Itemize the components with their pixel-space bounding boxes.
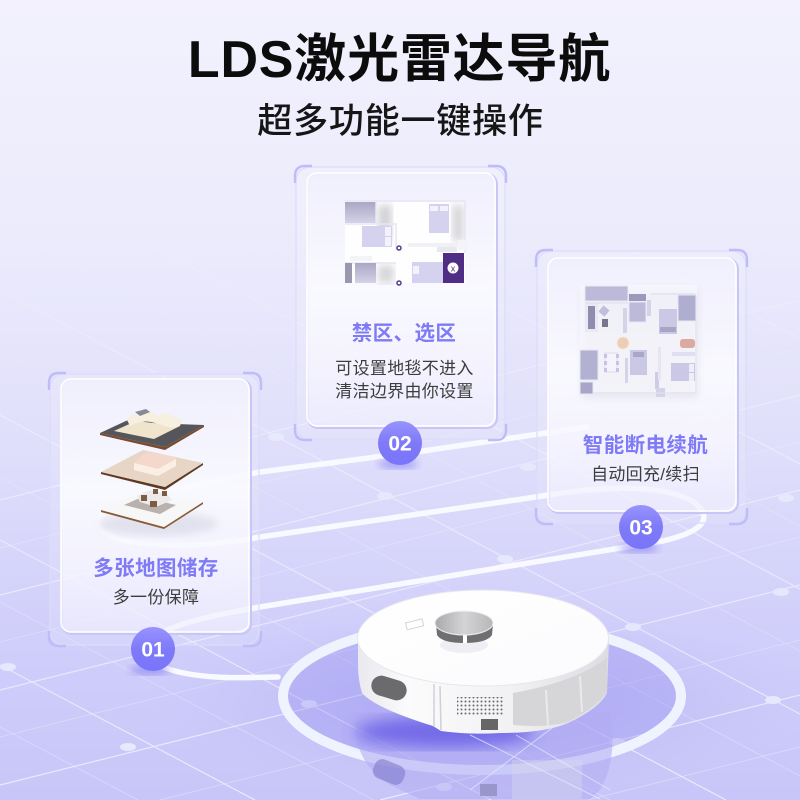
badge 03: 03	[629, 516, 653, 540]
robot top face	[358, 590, 608, 686]
badge 03	[619, 505, 663, 553]
floor plan with forbidden zone	[345, 201, 468, 285]
dust tank window	[513, 658, 607, 726]
panel: 03 power-off resume	[536, 250, 747, 524]
badge 02	[378, 421, 422, 469]
subheading: 超多功能一键操作	[257, 102, 544, 141]
card description: 多一份保障	[113, 588, 199, 607]
panel: 01 multi-map storage	[49, 373, 261, 646]
stacked floor layers	[98, 409, 218, 536]
body seam	[434, 684, 441, 730]
robot body	[358, 640, 609, 734]
badge 02: 02	[388, 432, 412, 456]
card heading: 智能断电续航	[583, 434, 708, 457]
radar ring around robot	[283, 622, 681, 770]
card heading: 禁区、选区	[352, 322, 456, 345]
badge 01	[130, 627, 175, 675]
heading: LDS激光雷达导航	[188, 31, 611, 89]
speaker dots	[457, 697, 503, 715]
route ribbon linking the three steps to the robot	[98, 427, 704, 678]
floor plan with robot	[580, 285, 698, 398]
top logo mark	[406, 619, 424, 630]
panel: 02 restricted zones	[295, 166, 506, 440]
card description	[335, 359, 474, 401]
lidar turret	[435, 611, 493, 653]
front sensor	[481, 719, 498, 730]
card heading: 多张地图储存	[93, 557, 219, 580]
badge 01: 01	[141, 638, 165, 662]
card description: 清洁边界由你设置	[335, 382, 474, 401]
robot reflection on floor	[355, 712, 612, 799]
robot vacuum	[358, 590, 609, 734]
floor plan with forbidden zone: x	[451, 264, 456, 274]
side sensor window	[369, 673, 409, 703]
card description: 可设置地毯不进入	[335, 359, 474, 378]
card description: 自动回充/续扫	[591, 465, 700, 484]
